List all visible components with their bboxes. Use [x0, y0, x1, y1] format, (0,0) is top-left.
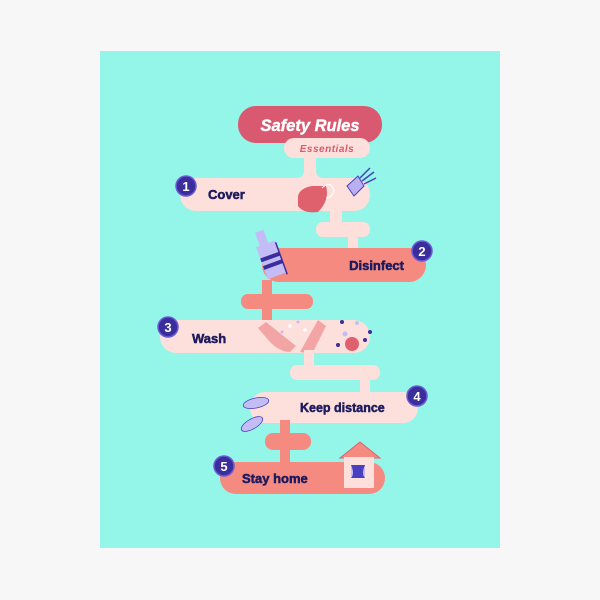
- step 2: disinfect: [251, 227, 432, 282]
- title pill: Safety Rules: [260, 117, 360, 135]
- step 5: stay home: Stay home: [242, 471, 308, 486]
- connector 4-5: [265, 420, 311, 464]
- step 4: keep distance: Keep distance: [300, 401, 385, 415]
- step 2: disinfect: Disinfect: [349, 258, 405, 273]
- step 4: keep distance: [239, 386, 427, 434]
- connector 1-2: [316, 205, 370, 251]
- step 5: stay home: [214, 442, 385, 494]
- subtitle pill: Essentials: [300, 144, 354, 155]
- icon: mask: [298, 184, 334, 212]
- step 1: cover: 1: [182, 179, 190, 194]
- step 4: keep distance: 4: [413, 389, 421, 404]
- step 2: disinfect: 2: [418, 244, 426, 259]
- step 1: cover: [176, 168, 376, 212]
- step 5: stay home: 5: [220, 459, 228, 474]
- step 3: wash: 3: [164, 320, 172, 335]
- icon: spray bottle: [251, 227, 287, 281]
- icon: house: [340, 442, 380, 488]
- icon: hands: [258, 320, 326, 354]
- title pill: [238, 106, 382, 143]
- icon: footprints: [239, 395, 270, 434]
- icon: drops and apple: [336, 320, 372, 351]
- icon: glove: [347, 168, 376, 196]
- poster background: [100, 51, 500, 548]
- step 3: wash: Wash: [192, 331, 226, 346]
- step 3: wash: [158, 317, 372, 354]
- connector 3-4: [290, 350, 380, 394]
- connector 2-3: [241, 280, 313, 323]
- step 1: cover: Cover: [208, 187, 245, 202]
- subtitle pill: [284, 138, 370, 158]
- connector: [296, 156, 324, 182]
